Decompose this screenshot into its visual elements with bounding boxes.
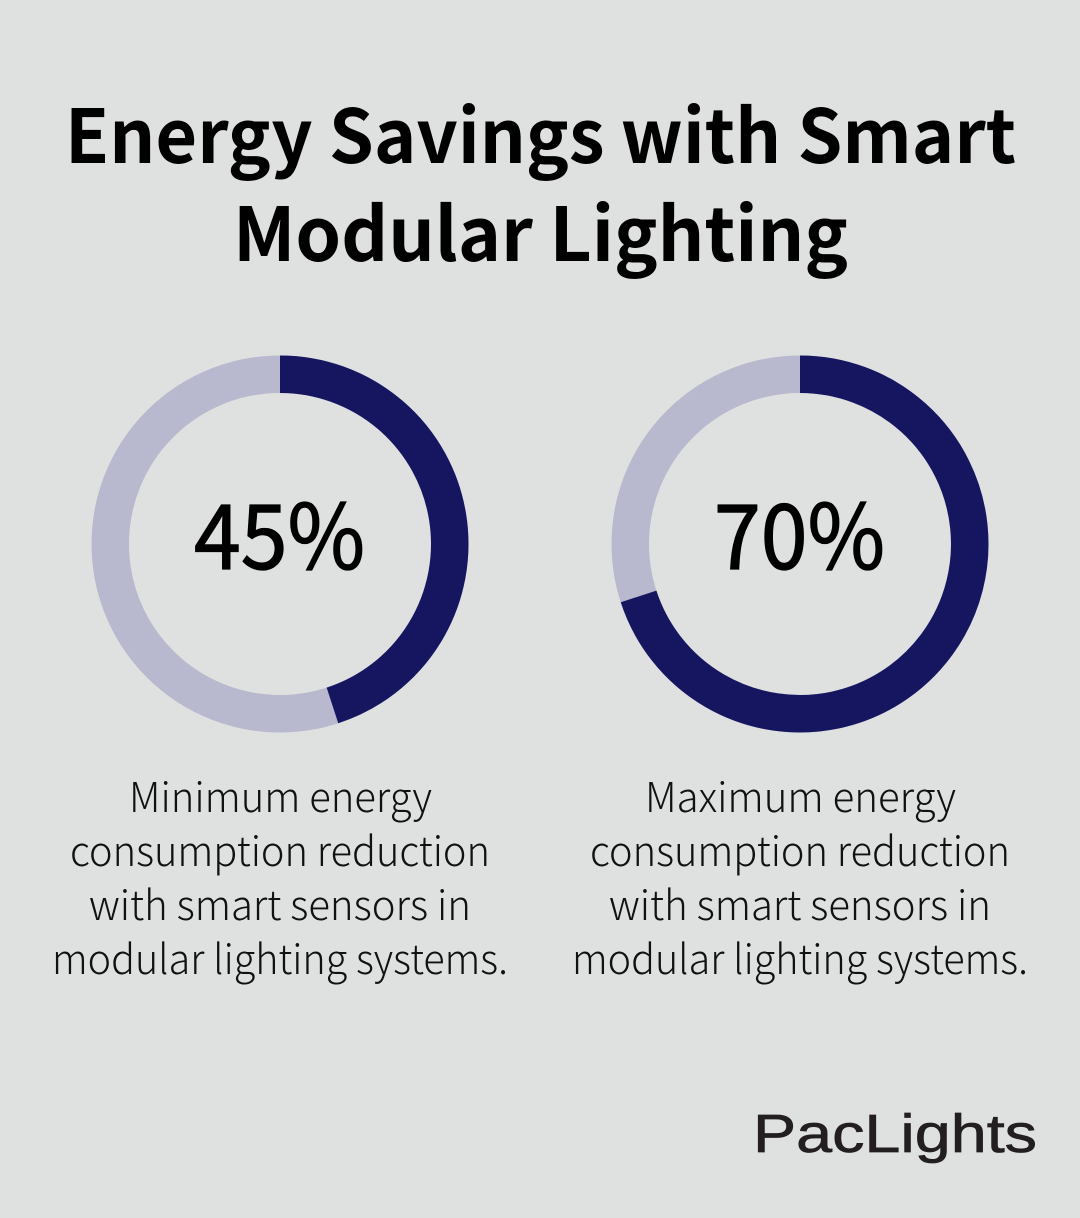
title: Modular Lighting	[233, 176, 848, 283]
description: minimum reduction	[52, 764, 508, 986]
description: minimum reduction: with smart sensors in	[89, 872, 471, 932]
description: minimum reduction: Minimum energy	[129, 764, 432, 824]
description: maximum reduction	[572, 764, 1028, 986]
description: minimum reduction: consumption reduction	[70, 818, 490, 878]
logo: PacLights: PacLights	[753, 1104, 1037, 1164]
panel: minimum reduction	[52, 374, 508, 986]
donut chart: 45%: 45%	[194, 465, 365, 595]
donut chart: 70%: 70%	[714, 465, 885, 595]
description: maximum reduction: with smart sensors in	[609, 872, 991, 932]
panel: maximum reduction	[572, 374, 1028, 986]
description: maximum reduction: Maximum energy	[645, 764, 956, 824]
donut chart: 70%	[630, 374, 970, 714]
title	[65, 78, 1016, 283]
description: maximum reduction: consumption reduction	[590, 818, 1010, 878]
donut chart: 45%	[110, 374, 450, 714]
description: minimum reduction: modular lighting systems.	[52, 926, 508, 986]
description: maximum reduction: modular lighting systems.	[572, 926, 1028, 986]
title: Energy Savings with Smart	[65, 78, 1016, 185]
